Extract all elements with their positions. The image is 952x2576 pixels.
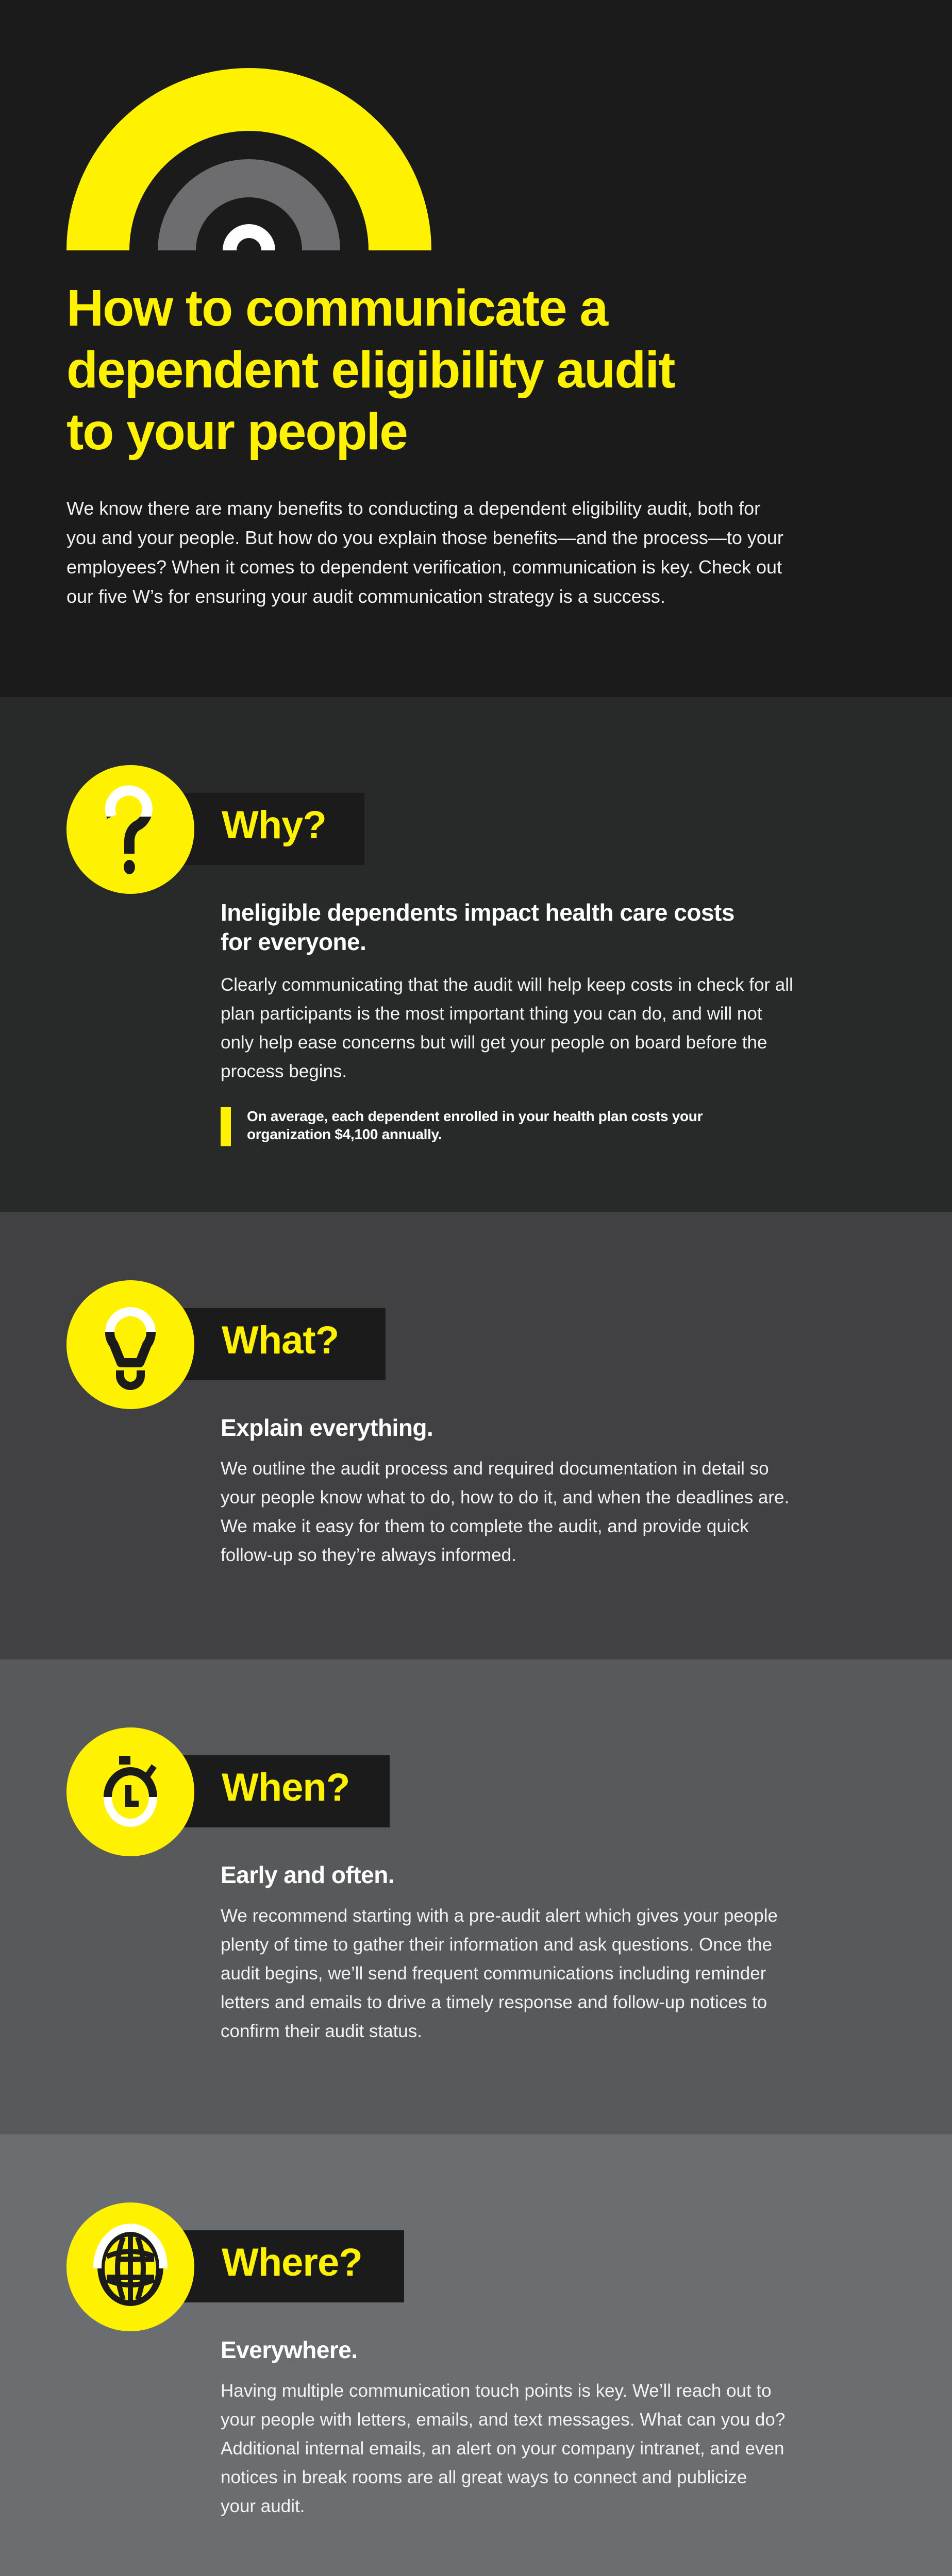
header section: [0, 0, 952, 697]
icon: stopwatch: [66, 1727, 194, 1856]
label box: where: [182, 2230, 404, 2302]
panel: when: [0, 1659, 952, 2134]
body: when: letters and emails to drive a timely response and follow-up notices to: [221, 1992, 767, 2012]
body: when: [221, 1906, 778, 2041]
label box: why: [182, 793, 364, 865]
heading: where: Everywhere.: [221, 2336, 358, 2363]
panel: what: [0, 1212, 952, 1659]
body: when: plenty of time to gather their information and ask questions. Once the: [221, 1935, 772, 1955]
body: what: follow-up so they’re always informed.: [221, 1545, 516, 1565]
intro text: our five W’s for ensuring your audit communication strategy is a success.: [66, 586, 665, 607]
body: where: notices in break rooms are all great ways to connect and publicize: [221, 2467, 747, 2487]
callout: why stat: organization $4,100 annually.: [247, 1126, 442, 1142]
intro text: We know there are many benefits to conducting a dependent eligibility audit, both for: [66, 498, 760, 519]
body: what: your people know what to do, how to do it, and when the deadlines are.: [221, 1487, 789, 1507]
intro text: employees? When it comes to dependent verification, communication is key. Check out: [66, 556, 782, 578]
body: why: only help ease concerns but will get your people on board before the: [221, 1032, 767, 1053]
heading: when: Early and often.: [221, 1861, 394, 1888]
body: why: plan participants is the most important thing you can do, and will not: [221, 1004, 762, 1024]
icon: globe: [66, 2202, 194, 2331]
callout: why stat: On average, each dependent enrolled in your health plan costs your: [247, 1108, 703, 1124]
heading label: Why?: Why?: [222, 803, 326, 847]
body: when: We recommend starting with a pre-audit alert which gives your people: [221, 1906, 778, 1926]
body: why: Clearly communicating that the audit will help keep costs in check for all: [221, 975, 793, 995]
body: what: We make it easy for them to complete the audit, and provide quick: [221, 1516, 749, 1536]
title: to your people: [66, 403, 407, 461]
title: How to communicate a: [66, 279, 607, 337]
callout: why stat: [221, 1107, 703, 1146]
label box: when: [182, 1755, 390, 1827]
body: where: your people with letters, emails, and text messages. What can you do?: [221, 2410, 785, 2430]
intro text: you and your people. But how do you explain those benefits—and the process—to your: [66, 527, 783, 548]
icon: light bulb: [66, 1280, 194, 1409]
icon: question mark: [66, 765, 194, 894]
heading: what: Explain everything.: [221, 1414, 433, 1441]
title: [66, 279, 675, 461]
heading label: Where?: Where?: [222, 2241, 362, 2284]
heading: why: Ineligible dependents impact health care costs: [221, 899, 734, 926]
body: what: We outline the audit process and required documentation in detail so: [221, 1459, 769, 1479]
body: where: Having multiple communication touch points is key. We’ll reach out to: [221, 2381, 772, 2401]
body: when: audit begins, we’ll send frequent communications including reminder: [221, 1963, 766, 1984]
intro text: [66, 498, 783, 607]
body: what: [221, 1459, 789, 1565]
body: where: [221, 2381, 785, 2516]
body: why: process begins.: [221, 1061, 347, 1081]
heading: why: for everyone.: [221, 928, 366, 955]
heading label: When?: When?: [222, 1766, 349, 1809]
title: dependent eligibility audit: [66, 341, 674, 399]
panel: where: [0, 2134, 952, 2576]
body: where: your audit.: [221, 2496, 305, 2516]
body: why: [221, 975, 793, 1081]
body: when: confirm their audit status.: [221, 2021, 422, 2041]
heading: why: [221, 899, 734, 955]
heading label: What?: What?: [222, 1318, 339, 1362]
label box: what: [182, 1308, 386, 1380]
panel: why: [0, 697, 952, 1212]
icon: rainbow arcs logo: [66, 68, 431, 250]
body: where: Additional internal emails, an alert on your company intranet, and even: [221, 2438, 784, 2459]
